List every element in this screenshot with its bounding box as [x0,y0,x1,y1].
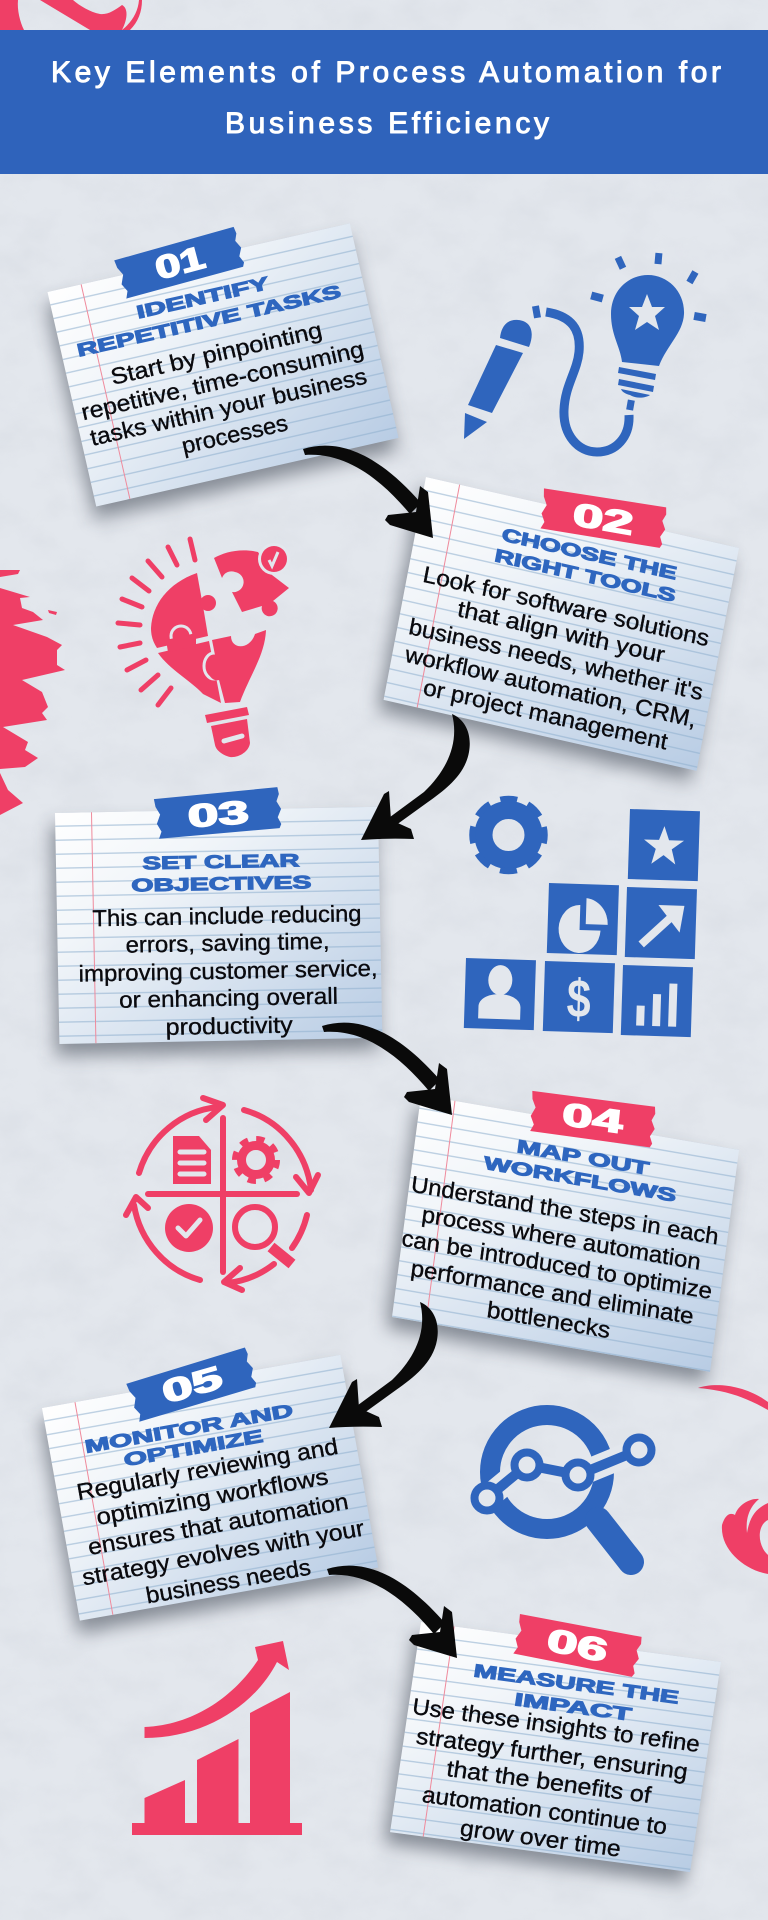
body text 06: that the benefits of [445,1755,653,1808]
card 06: measure the impact [384,1599,724,1884]
heading 02: RIGHT TOOLS [493,545,677,606]
icon: rising bar chart [132,1641,302,1835]
heading 06: IMPACT [513,1689,633,1725]
heading 04: MAP OUT [516,1136,650,1179]
body text 02 [396,560,715,760]
heading 04 [483,1131,680,1206]
heading 01: IDENTIFY [135,273,271,322]
icon: puzzle lightbulb [118,539,290,757]
heading 01: REPETITIVE TASKS [75,281,343,361]
card 01: identify repetitive tasks [39,201,401,519]
number tag 03 [154,787,283,839]
body text 05: business needs [144,1554,313,1608]
heading 04: WORKFLOWS [483,1153,677,1206]
body text 02: or project management [421,674,671,755]
body text 06: strategy further, ensuring [414,1723,690,1785]
body text 03: productivity [165,1011,293,1040]
number tag 06 [511,1612,644,1678]
body text 04: Understand the steps in each [410,1171,720,1249]
number tag 05: 05 [158,1359,226,1410]
title banner: Key Elements of Process Automation for [51,56,721,89]
body text 05 [65,1431,372,1619]
body text 05: strategy evolves with your [80,1515,367,1590]
body text 06: automation continue to [421,1781,669,1839]
icon: person square [464,958,536,1030]
heading 05: MONITOR AND [83,1400,295,1457]
heading 05 [83,1400,298,1477]
number tag 01 [114,226,246,299]
body text 02: workflow automation, CRM, [402,641,699,732]
body text 04: bottlenecks [485,1296,612,1343]
number tag 02: 02 [571,496,636,542]
card 05: monitor and optimize [34,1331,380,1633]
heading 05: OPTIMIZE [122,1426,265,1470]
heading 06 [469,1661,680,1731]
body text 02: business needs, whether it's [407,613,705,705]
icon: pen and star lightbulb [464,253,707,452]
body text 04: can be introduced to optimize [400,1225,714,1304]
arrow: step 4 to 5 [329,1302,438,1428]
arrow: step 2 to 3 [361,714,470,840]
body text 04: performance and eliminate [409,1255,695,1329]
number tag 06: 06 [544,1621,611,1669]
title banner [0,30,768,174]
body text 03: This can include reducing [92,900,362,931]
number tag 03: 03 [186,794,250,834]
decorative brush: right edge [698,1385,768,1574]
title banner: Business Efficiency [225,107,549,140]
body text 06 [394,1693,702,1870]
heading 03: SET CLEAR [142,850,300,873]
body text 01: Start by pinpointing [108,317,324,390]
arrow: step 1 to 2 [303,446,433,538]
number tag 01: 01 [151,239,209,286]
body text 03: improving customer service, [78,955,378,987]
icon: gear [472,799,544,871]
body text 03: errors, saving time, [125,928,330,958]
decorative brush: left edge [0,570,65,815]
body text 04 [393,1170,721,1360]
body text 05: Regularly reviewing and [75,1433,340,1505]
number tag 04: 04 [561,1096,625,1140]
number tag 05 [126,1347,258,1422]
body text 06: grow over time [459,1814,623,1862]
icon: dollar square [543,961,615,1033]
number tag 04 [528,1089,657,1149]
body text 06: Use these insights to refine [411,1693,702,1757]
heading 03: OBJECTIVES [131,872,312,896]
heading 06: MEASURE THE [472,1661,680,1708]
number tag 02 [539,486,668,549]
arrow: step 3 to 4 [322,1023,452,1115]
body text 05: optimizing workflows [94,1463,330,1530]
body text 03: or enhancing overall [119,983,338,1013]
body text 05: ensures that automation [86,1488,350,1560]
body text 01 [72,308,378,479]
icon: pie chart square [547,883,619,955]
body text 02: that align with your [456,595,667,668]
icon: process cycle [126,1098,318,1290]
heading 02: CHOOSE THE [500,524,678,584]
card 04: map out workflows [386,1066,743,1384]
icon: star square [628,809,700,881]
icon: bar chart square [621,965,693,1037]
body text 01: repetitive, time-consuming [79,336,366,425]
body text 02: Look for software solutions [421,561,711,651]
icon: growth arrow square [625,887,697,959]
heading 02 [493,524,681,606]
icon: dollar square: $ [566,969,592,1029]
body text 01: tasks within your business [88,363,369,451]
body text 03 [77,900,379,1042]
card 03: set clear objectives [51,785,383,1056]
heading 03 [131,850,312,896]
icon: magnifying glass with line graph [474,1415,652,1562]
card 02: choose the right tools [377,453,743,783]
body text 04: process where automation [420,1201,702,1275]
heading 01 [70,258,343,361]
decorative brush: top left [0,0,142,30]
body text 01: processes [179,409,290,459]
arrow: step 5 to 6 [327,1566,457,1658]
